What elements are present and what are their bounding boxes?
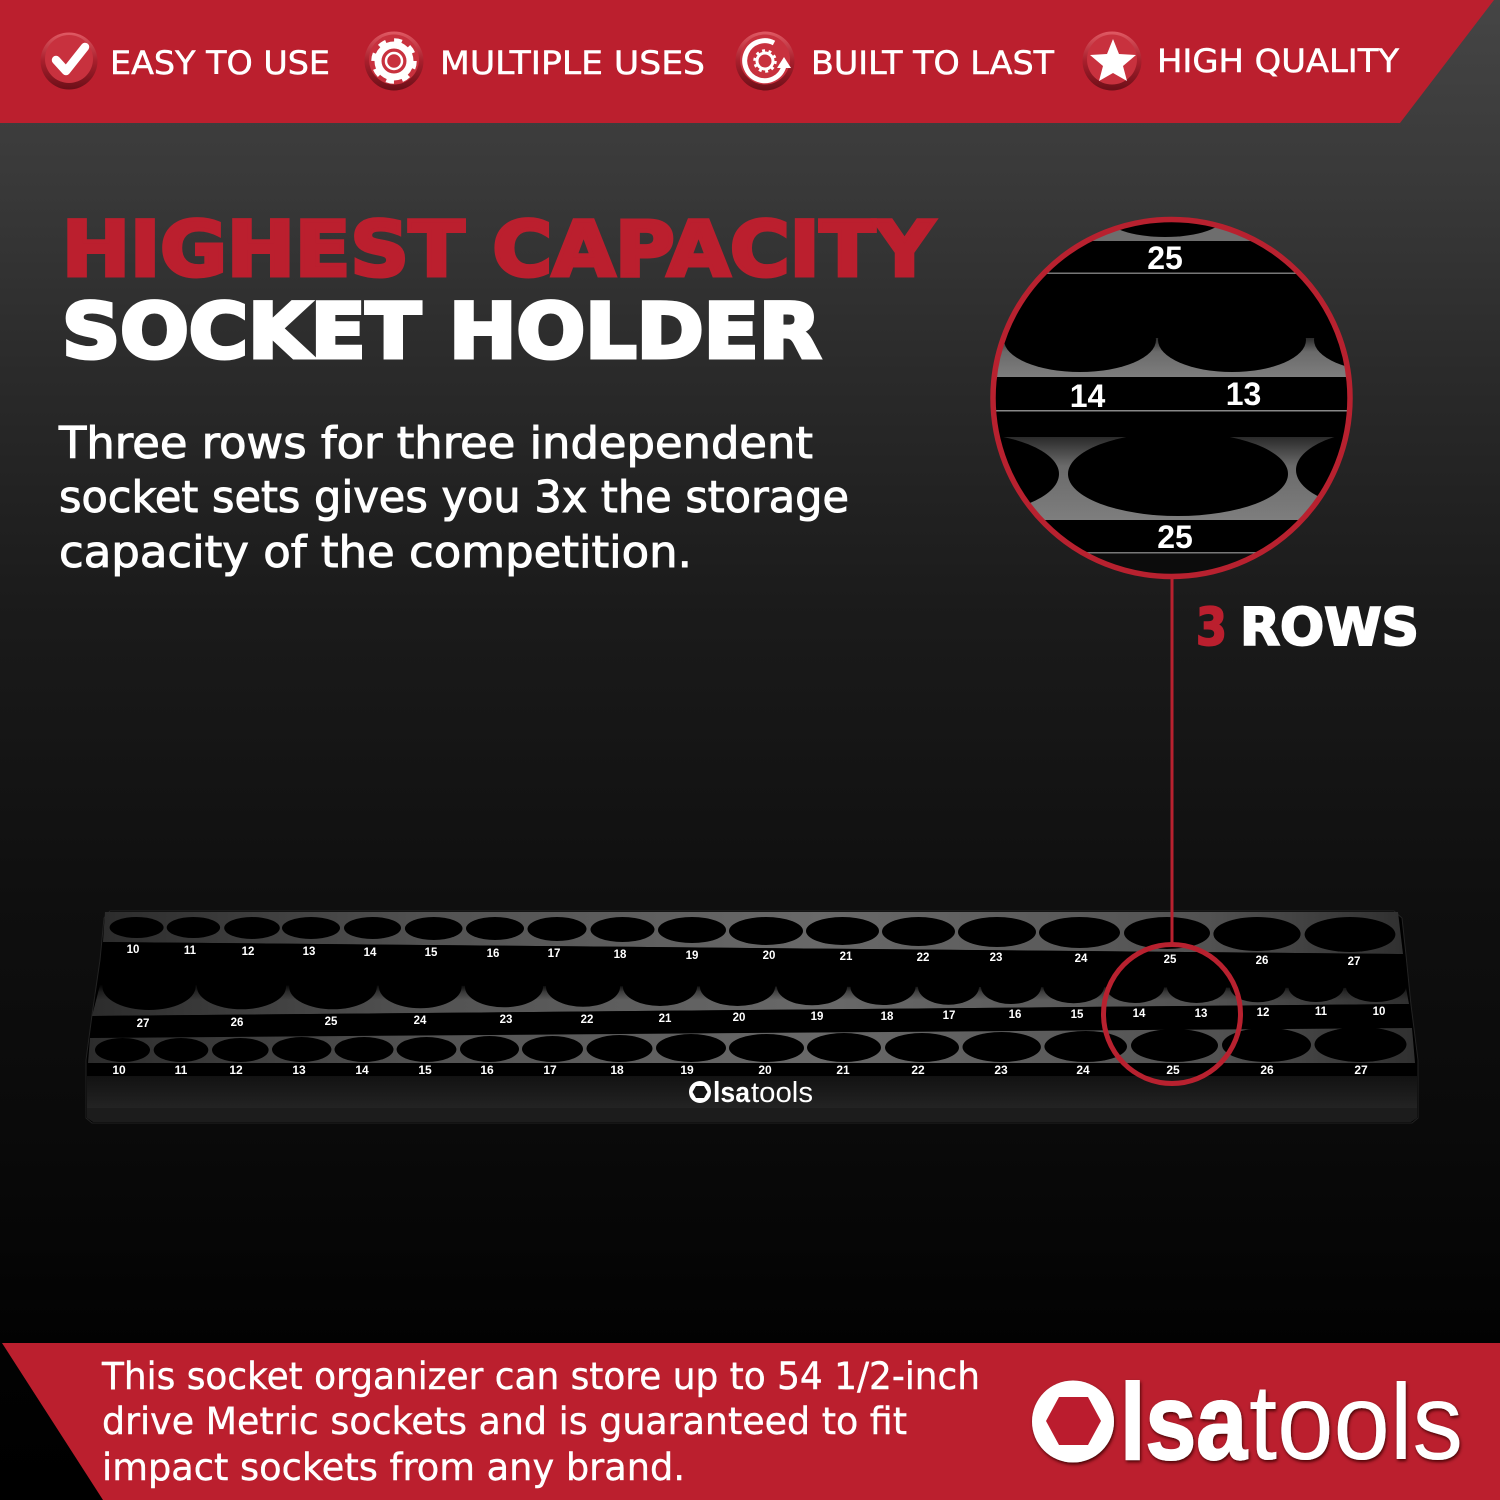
description text block — [58, 418, 849, 578]
top row numbers: 24 — [1075, 953, 1088, 965]
bottom row numbers: 19 — [680, 1063, 694, 1077]
top row numbers: 10 — [127, 944, 139, 956]
top row numbers: 18 — [614, 949, 627, 961]
callout connector line — [1170, 578, 1174, 944]
middle row numbers: 13 — [1195, 1008, 1207, 1020]
header banner — [0, 0, 1494, 123]
middle row numbers: 23 — [500, 1014, 512, 1026]
bottom row numbers: 21 — [836, 1063, 850, 1077]
top row numbers: 16 — [487, 948, 499, 960]
top row label strip — [103, 942, 1401, 966]
bottom row numbers: 27 — [1354, 1063, 1368, 1077]
magnified numbers — [1070, 240, 1261, 555]
icon: gear badge — [364, 32, 424, 90]
bottom row numbers: 13 — [292, 1063, 306, 1077]
footer text: impact sockets from any brand. — [102, 1446, 685, 1489]
tray logo — [689, 1077, 813, 1109]
benefit: built to last — [736, 32, 1054, 90]
title: SOCKET HOLDER — [62, 286, 821, 376]
top row numbers: 14 — [364, 947, 377, 959]
benefit: high quality — [1082, 32, 1399, 90]
top row numbers: 17 — [548, 948, 560, 960]
top row numbers: 19 — [686, 950, 698, 962]
bottom row numbers: 16 — [480, 1063, 494, 1077]
footer text — [101, 1355, 980, 1489]
top row holes — [110, 917, 1395, 952]
top row numbers: 26 — [1256, 955, 1268, 967]
product: socket holder tray — [86, 911, 1418, 1123]
upper surface — [1092, 228, 1250, 241]
bottom row holes — [95, 1027, 1406, 1062]
bottom row numbers: 24 — [1076, 1063, 1090, 1077]
middle strip — [990, 378, 1353, 411]
top row numbers: 12 — [242, 946, 254, 958]
3 rows label: 3 — [1196, 598, 1227, 658]
3 rows label: ROWS — [1240, 598, 1419, 658]
icon: cycle gear badge — [736, 32, 794, 90]
description text block: Three rows for three independent — [58, 418, 813, 469]
title — [62, 204, 935, 376]
bottom row numbers: 20 — [758, 1063, 772, 1077]
upper strip — [990, 241, 1353, 273]
middle row numbers: 27 — [137, 1018, 149, 1030]
bottom row numbers: 26 — [1260, 1063, 1274, 1077]
middle row numbers: 16 — [1009, 1009, 1021, 1021]
bottom row surface — [88, 1028, 1415, 1063]
middle row numbers: 15 — [1071, 1009, 1084, 1021]
top row numbers: 27 — [1348, 956, 1360, 968]
top row numbers: 13 — [303, 946, 315, 958]
bottom row numbers: 10 — [112, 1063, 126, 1077]
middle row numbers: 17 — [943, 1010, 955, 1022]
middle row numbers: 19 — [811, 1011, 823, 1023]
middle row numbers: 22 — [581, 1014, 593, 1026]
middle row holes — [102, 964, 1406, 1010]
label: EASY TO USE — [110, 44, 330, 82]
top row surface — [103, 912, 1403, 954]
bottom row numbers: 25 — [1166, 1063, 1180, 1077]
base lip — [87, 1108, 1417, 1122]
middle row numbers: 20 — [733, 1012, 745, 1024]
footer text: drive Metric sockets and is guaranteed to fit — [102, 1400, 907, 1443]
footer logo — [1032, 1361, 1463, 1483]
top row numbers: 20 — [763, 950, 775, 962]
bottom row label strip — [88, 1063, 1415, 1076]
tray logo: O — [689, 1077, 711, 1109]
description text block: capacity of the competition. — [59, 527, 692, 578]
front face — [87, 1076, 1417, 1108]
middle row label strip — [93, 1004, 1409, 1029]
tray logo: lsa — [713, 1077, 751, 1109]
magnified numbers: 13 — [1226, 376, 1261, 412]
label: HIGH QUALITY — [1157, 42, 1399, 80]
middle row numbers — [137, 1006, 1385, 1030]
benefit: multiple uses — [364, 32, 705, 90]
middle row numbers: 26 — [231, 1017, 243, 1029]
footer logo: tools — [1249, 1361, 1463, 1482]
middle row numbers: 12 — [1257, 1007, 1269, 1019]
footer logo: lsa — [1120, 1361, 1248, 1482]
description text block: socket sets gives you 3x the storage — [59, 472, 849, 523]
magnified numbers: 25 — [1147, 240, 1183, 276]
middle row numbers: 14 — [1133, 1008, 1146, 1020]
bottom row numbers: 17 — [543, 1063, 557, 1077]
lens base — [996, 274, 1347, 520]
tray body — [86, 911, 1418, 1123]
icon: check badge — [40, 32, 98, 90]
top row numbers: 11 — [184, 945, 197, 957]
bottom row numbers: 22 — [911, 1063, 925, 1077]
magnified numbers: 14 — [1070, 378, 1106, 414]
top row numbers: 15 — [425, 947, 438, 959]
bottom row numbers — [112, 1063, 1368, 1077]
bottom row numbers: 12 — [229, 1063, 243, 1077]
magnified numbers: 25 — [1157, 519, 1193, 555]
benefit: easy to use — [40, 32, 330, 90]
middle row numbers: 11 — [1315, 1006, 1328, 1018]
title: HIGHEST CAPACITY — [62, 204, 935, 294]
middle surface — [990, 338, 1353, 377]
lower surface — [990, 437, 1353, 520]
bottom row numbers: 18 — [610, 1063, 624, 1077]
footer banner — [2, 1343, 1500, 1500]
middle row numbers: 21 — [659, 1013, 672, 1025]
bottom row numbers: 11 — [175, 1063, 188, 1077]
bottom row numbers: 23 — [994, 1063, 1008, 1077]
footer text: This socket organizer can store up to 54 1/2-inch — [101, 1355, 980, 1398]
top row numbers: 21 — [840, 951, 853, 963]
middle row numbers: 25 — [325, 1016, 338, 1028]
middle row surface — [92, 985, 1409, 1016]
lower holes — [1000, 437, 1343, 516]
label: BUILT TO LAST — [811, 44, 1054, 82]
icon: star badge — [1082, 32, 1142, 90]
footer logo: O — [1032, 1362, 1114, 1483]
lower strip — [990, 520, 1353, 552]
lens ring — [993, 220, 1350, 576]
middle row numbers: 24 — [414, 1015, 427, 1027]
top row numbers: 25 — [1164, 954, 1177, 966]
middle holes — [1004, 338, 1344, 372]
bottom row numbers: 14 — [355, 1063, 369, 1077]
tray logo: tools — [751, 1077, 813, 1109]
callout ring on tray — [1104, 944, 1240, 1084]
top row numbers: 22 — [917, 952, 929, 964]
top row numbers — [127, 944, 1360, 968]
label: MULTIPLE USES — [440, 44, 705, 82]
middle row numbers: 18 — [881, 1011, 894, 1023]
magnified detail circle — [990, 216, 1353, 580]
middle row numbers: 10 — [1373, 1006, 1385, 1018]
middle row surface shade — [92, 985, 1409, 1000]
top row numbers: 23 — [990, 952, 1002, 964]
bottom row numbers: 15 — [418, 1063, 432, 1077]
